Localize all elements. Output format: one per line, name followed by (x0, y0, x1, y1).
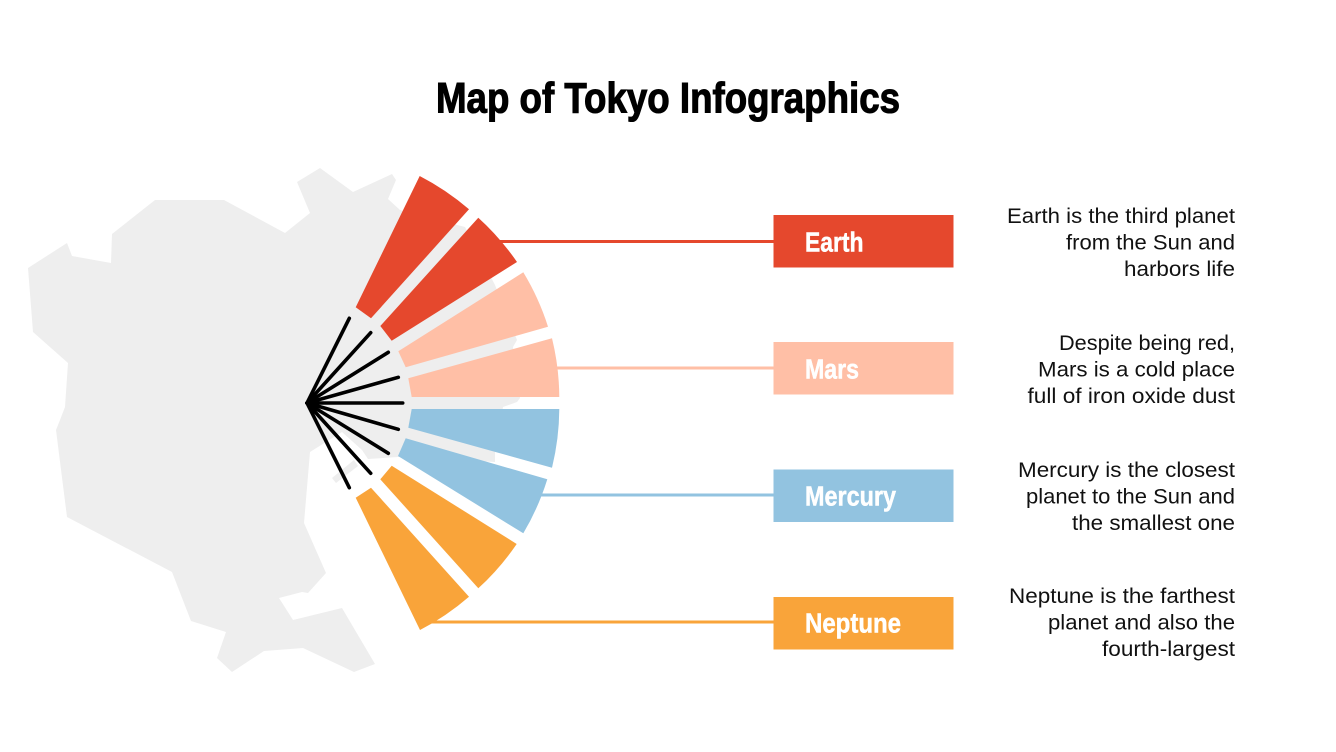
text block: Mercury (1018, 458, 1235, 535)
fan: peach Mars blades (398, 272, 559, 397)
label: Neptune (774, 597, 954, 650)
label: Mars (774, 342, 954, 394)
text block: Neptune: fourth-largest (1102, 637, 1235, 661)
text block: Mars: Mars is a cold place (1038, 358, 1235, 382)
label: Mercury (774, 470, 954, 522)
text block: Mars: Despite being red, (1059, 331, 1235, 355)
text block: Neptune: Neptune is the farthest (1009, 584, 1235, 608)
text block: Earth: from the Sun and (1066, 230, 1235, 254)
label: Mercury: Mercury (805, 480, 897, 512)
label: Earth (774, 215, 954, 268)
text block: Earth (1007, 204, 1235, 281)
text block: Earth: Earth is the third planet (1007, 204, 1235, 228)
text block: Mercury: the smallest one (1072, 511, 1235, 535)
text block: Mars: full of iron oxide dust (1028, 384, 1235, 408)
label: Mars: Mars (805, 354, 859, 384)
text block: Mars (1028, 331, 1235, 408)
text block: Neptune (1009, 584, 1235, 661)
fan: orange Neptune blades (356, 466, 517, 630)
fan: red Earth blades (356, 176, 517, 341)
text block: Mercury: Mercury is the closest (1018, 458, 1235, 482)
text block: Mercury: planet to the Sun and (1026, 484, 1235, 508)
fan: blue Mercury blades (398, 409, 559, 533)
label: Neptune: Neptune (805, 608, 901, 638)
fan ribs (307, 318, 403, 488)
text block: Neptune: planet and also the (1048, 610, 1235, 634)
label: Earth: Earth (805, 226, 864, 258)
title: Map of Tokyo Infographics (436, 74, 900, 122)
connector lines (425, 242, 774, 622)
text block: Earth: harbors life (1124, 257, 1235, 281)
map of Tokyo silhouette (28, 168, 520, 672)
